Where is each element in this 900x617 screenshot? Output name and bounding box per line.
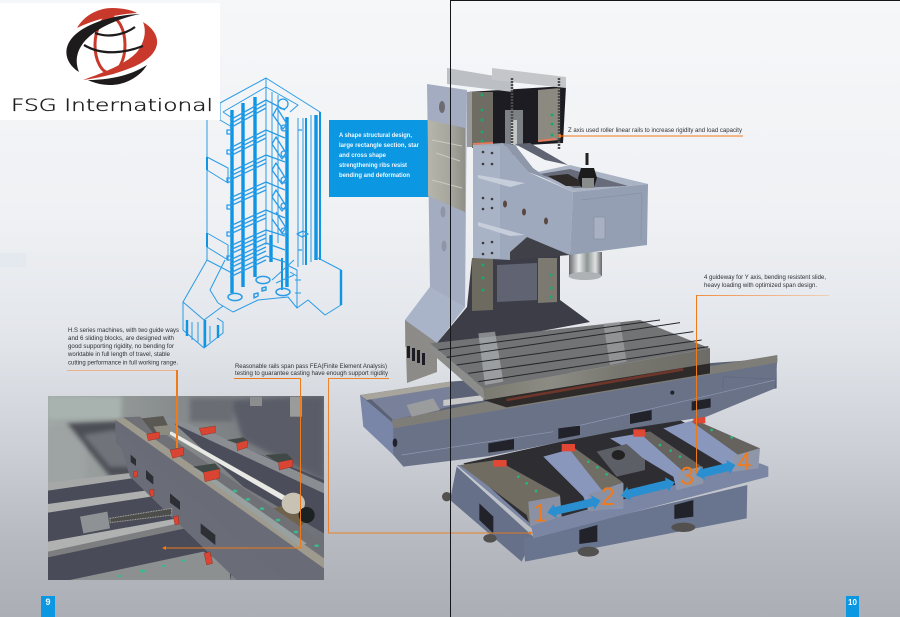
work table (430, 320, 710, 407)
callout: Z axis rails: Z axis used roller linear rails to increase rigidity and load capacity (568, 127, 743, 134)
callout: rails span FEA: testing to guarantee casting have enough support rigidity (235, 370, 389, 377)
logo globe mark (66, 8, 157, 85)
FSG International logo (0, 3, 220, 120)
callout: two guide ways: H.S series machines, with two guide ways (68, 327, 180, 334)
page number 9: 9 (45, 597, 51, 607)
callout: two guide ways: worktable in full length of travel, stable (67, 351, 170, 358)
photo: guide rails close-up (48, 396, 324, 580)
page fold and frame lines (450, 0, 900, 617)
page number 10: 10 (848, 598, 857, 607)
callout: two guide ways: cutting performance in full working range. (68, 360, 178, 366)
callout text (339, 132, 420, 179)
panel: structural design callout (329, 120, 430, 197)
callout: rails span FEA: Reasonable rails span pass FEA(Finite Element Analysis) (235, 363, 387, 370)
guideway numbers: 2 (601, 484, 615, 511)
side ports (227, 99, 308, 260)
bed (442, 417, 768, 562)
lower rails and dark back wall (437, 255, 590, 348)
callout: Y axis guideways: heavy loading with optimized span design. (704, 282, 817, 289)
callout text: bending and deformation (339, 172, 410, 179)
callout text: A shape structural design, (339, 132, 412, 139)
callout: two guide ways: and 6 sliding blocks, are designed with (68, 335, 174, 342)
callout text: and cross shape (339, 152, 386, 159)
callout: two guide ways: good supporting rigidity, no bending for (68, 343, 175, 350)
saddle (360, 355, 777, 467)
spindle (568, 252, 602, 280)
callout text: large rectangle section, star (339, 142, 420, 149)
rail spacing arrows (547, 460, 735, 518)
callout: two guide ways (67, 327, 180, 448)
rib lines (230, 100, 285, 277)
page number 9 (41, 596, 55, 617)
guideway numbers: 3 (680, 463, 694, 490)
machine base: table, saddle, bed (360, 320, 777, 562)
guideway numbers: 4 (738, 449, 751, 476)
callout: Y axis guideways (694, 274, 829, 474)
column (405, 84, 467, 383)
rear dark bay and rails (447, 68, 566, 155)
machine column and spindle head (405, 68, 648, 383)
callout: rails span FEA (162, 363, 533, 550)
callout text: strengthening ribs resist (339, 162, 408, 169)
callout: Y axis guideways: 4 guideway for Y axis, bending resistent slide, (704, 274, 826, 281)
spindle head (473, 143, 648, 260)
red linear blocks (133, 426, 293, 565)
guideway numbers (533, 449, 751, 528)
callout: Z axis rails (557, 127, 743, 138)
column structure line drawing (183, 78, 341, 348)
guideway numbers: 1 (533, 501, 547, 528)
page number 10 (846, 596, 859, 617)
rail blocks (460, 417, 760, 527)
logo wordmark: FSG International (11, 96, 213, 116)
